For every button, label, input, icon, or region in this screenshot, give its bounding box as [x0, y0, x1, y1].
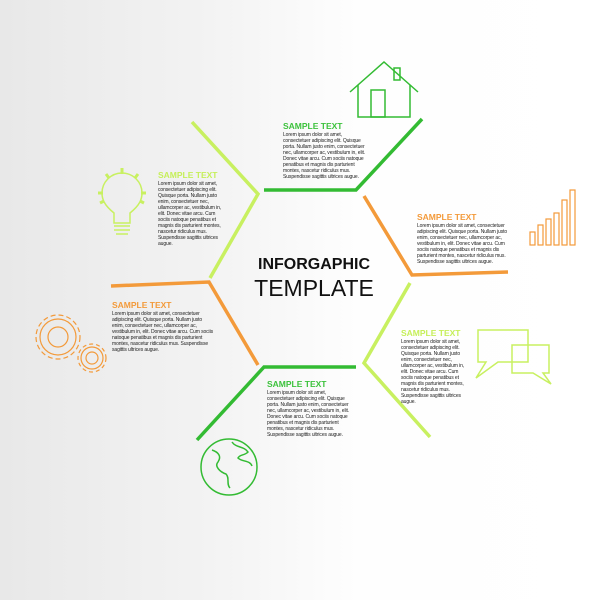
- title: [254, 256, 374, 301]
- text block: right: SAMPLE TEXT: [417, 212, 477, 222]
- icon: lightbulb: [98, 168, 146, 234]
- text block: lower right: SAMPLE TEXT: [401, 328, 461, 338]
- text block: bottom: Lorem ipsum dolor sit amet, consectetuer adipiscing elit. Quisque porta. Nullam justo enim, consectetuer nec, ullamcorper ac, vestibulum in, elit. Donec vitae arcu. Cum sociis natoque penatibus et magnis dis parturient montes, nascetur ridiculus mus. Suspendisse sagittis ultrices augue.: [267, 390, 349, 438]
- text block: right: Lorem ipsum dolor sit amet, consectetuer adipiscing elit. Quisque porta. Nullam justo enim, consectetuer nec, ullamcorper ac, vestibulum in, elit. Donec vitae arcu. Cum sociis natoque penatibus et magnis dis parturient montes, nascetur ridiculus mus. Suspendisse sagittis ultrices augue.: [417, 223, 507, 265]
- segment: top-left light green: [192, 122, 258, 278]
- text block: top: Lorem ipsum dolor sit amet, consectetuer adipiscing elit. Quisque porta. Nullam justo enim, consectetuer nec, ullamcorper ac, vestibulum in, elit. Donec vitae arcu. Cum sociis natoque penatibus et magnis dis parturient montes, nascetur ridiculus mus. Suspendisse sagittis ultrices augue.: [283, 132, 365, 180]
- segment: right light green: [364, 283, 430, 437]
- icon: speech bubbles: [476, 330, 551, 384]
- text block: left: SAMPLE TEXT: [112, 300, 172, 310]
- segment: top green: [264, 119, 422, 190]
- text block: upper left: SAMPLE TEXT: [158, 170, 218, 180]
- title: TEMPLATE: [254, 275, 374, 301]
- text block: bottom: SAMPLE TEXT: [267, 379, 327, 389]
- icon: house: [350, 62, 418, 117]
- text block: left: Lorem ipsum dolor sit amet, consectetuer adipiscing elit. Quisque porta. Nullam justo enim, consectetuer nec, ullamcorper ac, vestibulum in, elit. Donec vitae arcu. Cum sociis natoque penatibus et magnis dis parturient montes, nascetur ridiculus mus. Suspendisse sagittis ultrices augue.: [112, 311, 213, 353]
- text block: lower right: Lorem ipsum dolor sit amet, consectetuer adipiscing elit. Quisque porta. Nullam justo enim, consectetuer nec, ullamcorper ac, vestibulum in, elit. Donec vitae arcu. Cum sociis natoque penatibus et magnis dis parturient montes, nascetur ridiculus mus. Suspendisse sagittis ultrices augue.: [401, 339, 464, 405]
- icon: globe: [201, 439, 257, 495]
- title: INFORGAPHIC: [258, 256, 370, 273]
- text block: top: SAMPLE TEXT: [283, 121, 343, 131]
- segment: right orange: [364, 196, 508, 275]
- icon: gears: [36, 315, 106, 372]
- icon: bar chart: [530, 190, 575, 245]
- segment: bottom green: [197, 367, 356, 440]
- text block: upper left: Lorem ipsum dolor sit amet, consectetuer adipiscing elit. Quisque porta. Nullam justo enim, consectetuer nec, ullamcorper ac, vestibulum in, elit. Donec vitae arcu. Cum sociis natoque penatibus et magnis dis parturient montes, nascetur ridiculus mus. Suspendisse sagittis ultrices augue.: [158, 181, 221, 247]
- segment: left orange: [111, 282, 258, 365]
